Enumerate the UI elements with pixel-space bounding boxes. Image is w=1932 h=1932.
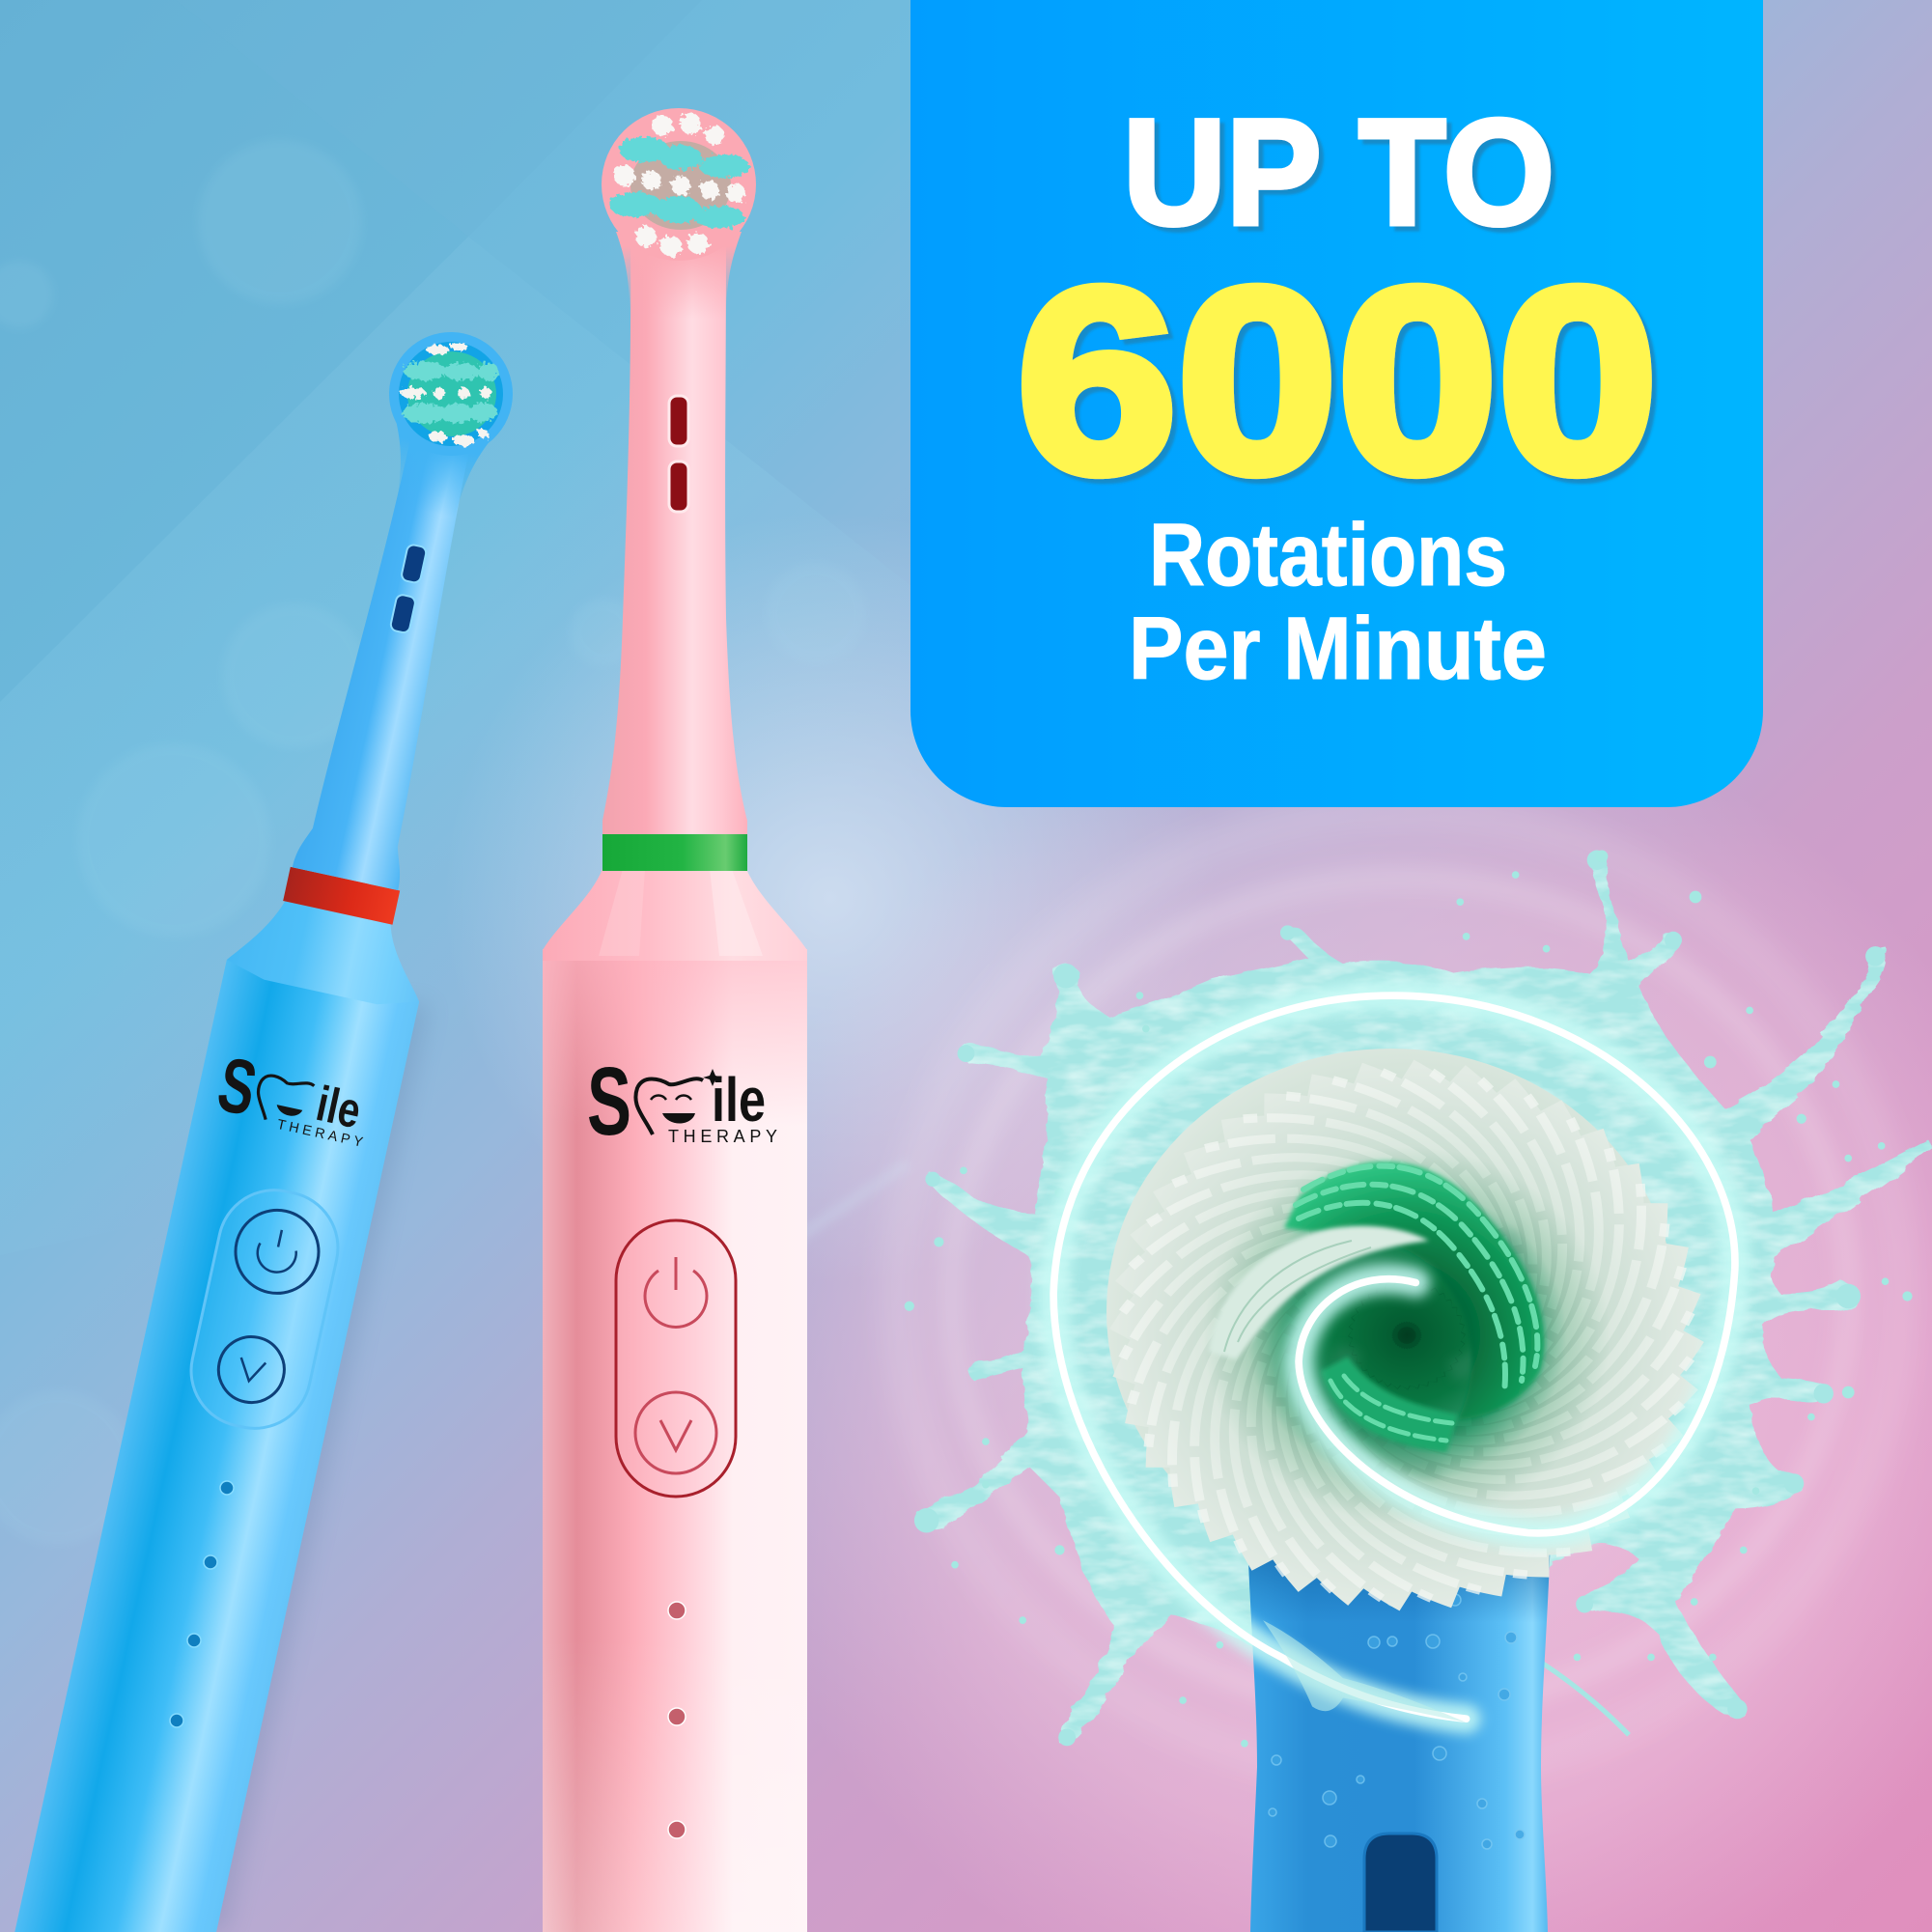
- soft shadow valleys in the whorl: [1134, 1045, 1688, 1563]
- blue brush button pill: [181, 1180, 349, 1439]
- pink brush body: [543, 949, 807, 1932]
- pink brush logo: THERAPY: [668, 1127, 777, 1146]
- blue brush body: [11, 313, 560, 1932]
- upper green bristle crescent: [1284, 1162, 1544, 1419]
- pink brush neck: [602, 241, 747, 834]
- blue toothbrush: [11, 313, 560, 1932]
- blue brush bristles: [401, 343, 499, 446]
- swirling bristles: [1068, 1021, 1746, 1650]
- blue brush head: [378, 321, 524, 467]
- lower green bristle crescent: [1321, 1357, 1458, 1452]
- pink brush logo: [587, 1048, 777, 1156]
- pink brush indicator dots: [668, 1602, 686, 1838]
- pink brush button pill: [616, 1220, 736, 1497]
- blue power button: [228, 1202, 326, 1302]
- nozzle slot: [1364, 1834, 1437, 1932]
- blue brush logo: S: [210, 1041, 264, 1132]
- pink neck transition: [616, 232, 742, 319]
- blue mode button: [212, 1330, 291, 1409]
- bristle disc base: [1106, 1049, 1676, 1574]
- headline panel: [910, 0, 1763, 807]
- text: Rotations: Rotations: [1149, 506, 1507, 604]
- pink toothbrush: [543, 108, 807, 1932]
- text: Per Minute: Per Minute: [1129, 600, 1547, 698]
- blue brush vents: [390, 544, 427, 633]
- blue brush indicator dots: [170, 1481, 234, 1727]
- pink brush shoulder: [543, 869, 807, 961]
- blue brush logo: ile: [312, 1076, 366, 1138]
- pink brush bristles: [609, 113, 749, 257]
- pink brush logo: S: [587, 1048, 631, 1156]
- text: UP TO: UP TO: [1123, 89, 1554, 257]
- pale inner bristle arm: [1209, 1226, 1429, 1359]
- glowing spiral ring: [1053, 995, 1735, 1722]
- text: 6000: 6000: [1017, 234, 1658, 527]
- water wisp over nozzle: [1263, 1620, 1467, 1722]
- pink brush vents: [669, 396, 688, 512]
- pink power button: [645, 1257, 707, 1327]
- blue brush logo: [210, 1041, 378, 1157]
- blue neck transition: [375, 411, 495, 523]
- splash tip droplets: [914, 851, 1886, 1746]
- water droplets: [905, 851, 1913, 1748]
- blue brush logo: THERAPY: [275, 1117, 365, 1151]
- blue brush soft shadow: [145, 1004, 430, 1932]
- water splash: [905, 851, 1932, 1748]
- bristle fibre base layer: [1094, 1045, 1720, 1626]
- blue brush neck: [293, 434, 492, 890]
- nozzle water beads: [1269, 1594, 1525, 1849]
- blue brush nozzle close-up: [1247, 1535, 1551, 1932]
- background ripple rings behind the swirl: [898, 811, 1902, 1777]
- blue brush red ring: [283, 867, 400, 925]
- pink brush green ring: [602, 834, 747, 871]
- pink brush logo: ile: [712, 1065, 766, 1134]
- bristle fibre highlight layer: [1068, 1021, 1746, 1650]
- pink brush head: [602, 108, 756, 261]
- pink mode button: [635, 1392, 716, 1473]
- thin splash trail: [1543, 1664, 1629, 1735]
